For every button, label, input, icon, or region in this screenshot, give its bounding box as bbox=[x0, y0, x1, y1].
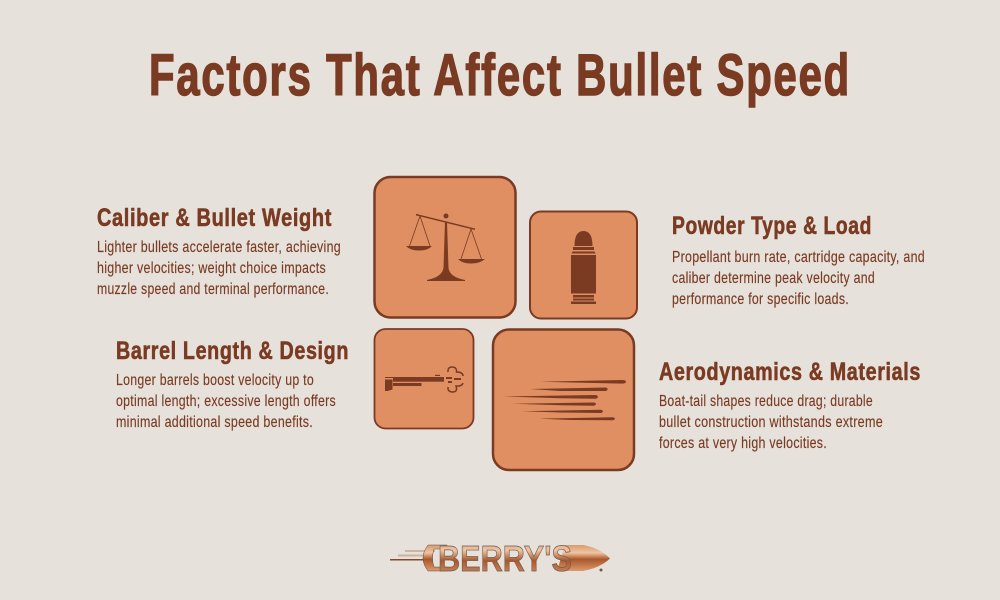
logo: Berry's bullet: BERRY'S bbox=[438, 538, 572, 579]
text: caliber description: Lighter bullets accelerate faster, achieving bbox=[97, 239, 341, 256]
panel: caliber and bullet weight text bbox=[97, 204, 341, 298]
text: barrel description: optimal length; excessive length offers bbox=[116, 393, 336, 410]
panel: aerodynamics and materials text bbox=[659, 358, 921, 452]
text: caliber description: higher velocities; weight choice impacts bbox=[97, 260, 326, 277]
icon tile: rifle barrel bbox=[374, 329, 474, 428]
panel: barrel length and design text bbox=[116, 337, 349, 431]
heading: caliber and bullet weight: Caliber & Bullet Weight bbox=[97, 204, 332, 232]
text: barrel description: Longer barrels boost velocity up to bbox=[116, 372, 314, 389]
text: aerodynamics description: forces at very high velocities. bbox=[659, 435, 827, 452]
text: caliber description bbox=[97, 239, 341, 298]
text: powder description: Propellant burn rate, cartridge capacity, and bbox=[672, 249, 925, 266]
panel: powder type and load text bbox=[672, 212, 925, 308]
text: barrel description: minimal additional speed benefits. bbox=[116, 414, 313, 431]
text: caliber description: muzzle speed and terminal performance. bbox=[97, 281, 329, 298]
text: powder description: caliber determine peak velocity and bbox=[672, 270, 875, 287]
icon tile: speed lines bbox=[493, 330, 634, 470]
text: powder description: performance for specific loads. bbox=[672, 291, 849, 308]
text: aerodynamics description bbox=[659, 393, 883, 452]
heading: barrel length and design: Barrel Length & Design bbox=[116, 337, 349, 365]
text: powder description bbox=[672, 249, 925, 308]
text: aerodynamics description: bullet construction withstands extreme bbox=[659, 414, 883, 431]
text: barrel description bbox=[116, 372, 336, 431]
heading: aerodynamics and materials: Aerodynamics & Materials bbox=[659, 358, 921, 386]
icon tile: cartridge bbox=[530, 212, 637, 318]
text: aerodynamics description: Boat-tail shapes reduce drag; durable bbox=[659, 393, 873, 410]
icon tile: balance scale bbox=[374, 177, 516, 318]
heading: powder type and load: Powder Type & Load bbox=[672, 212, 872, 240]
